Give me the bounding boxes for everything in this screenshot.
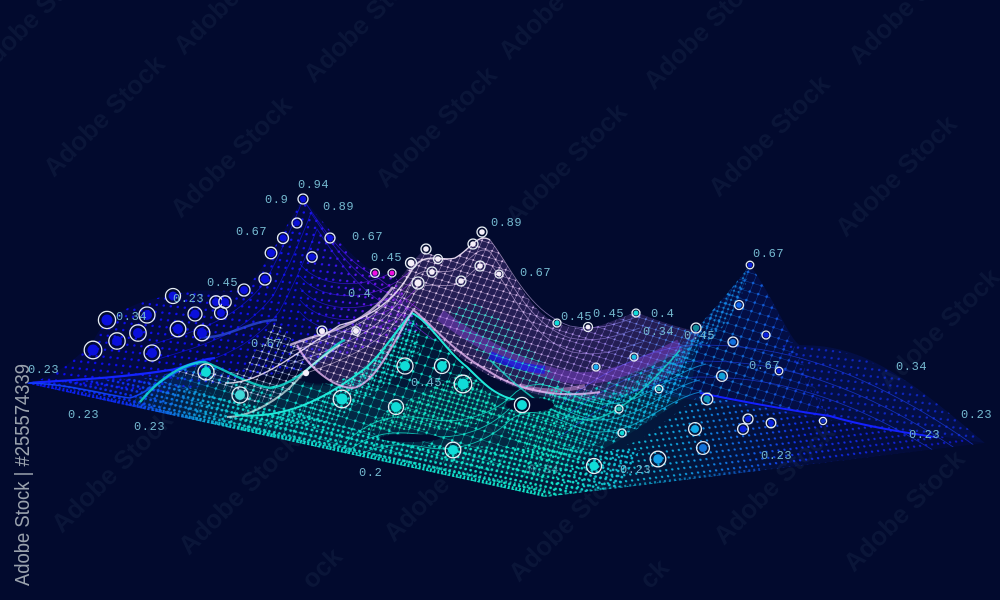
wave mesh surface	[25, 199, 985, 497]
data value labels: 0.67	[352, 230, 383, 244]
watermarks: Adobe Stock	[164, 89, 298, 223]
magenta data points	[371, 269, 396, 277]
pink central mesh	[290, 238, 700, 401]
teal centre bowl	[360, 374, 500, 432]
teal data points	[198, 309, 663, 474]
watermarks: Adobe Stock	[369, 59, 503, 193]
watermarks: Adobe Stock	[37, 48, 171, 182]
floor grid	[25, 372, 985, 497]
data value labels: 0.9	[265, 193, 288, 207]
back-left blue mountain	[25, 199, 434, 395]
dark valley gaps	[380, 398, 554, 442]
teal foreground mesh	[130, 303, 706, 480]
data value labels: 0.45	[371, 251, 402, 265]
data value labels: 0.23	[761, 449, 792, 463]
watermarks: Adobe Stock	[172, 426, 306, 560]
data value labels: 0.23	[134, 420, 165, 434]
teal left bowl	[225, 313, 420, 425]
watermarks: Adobe Stock	[377, 413, 511, 547]
blue data points	[84, 194, 335, 361]
data value labels: 0.4	[651, 307, 674, 321]
data value labels: 0.89	[323, 200, 354, 214]
bright ridge lines	[140, 238, 680, 420]
data value labels: 0.94	[298, 178, 329, 192]
data value labels: 0.45	[593, 307, 624, 321]
blue horizon streaks	[28, 320, 935, 437]
vertical stock credit: Adobe Stock | #255574339	[12, 364, 34, 586]
watermarks: Adobe Stock	[499, 96, 633, 230]
data value labels: 0.4	[348, 287, 371, 301]
watermarks: ock	[295, 541, 348, 594]
data value labels	[28, 178, 992, 480]
watermarks: Adobe Stock	[707, 416, 841, 550]
watermarks: Adobe Stock	[45, 404, 179, 538]
data value labels: 0.67	[753, 247, 784, 261]
teal upper ridge	[450, 303, 640, 406]
back-right blue mountain	[560, 267, 984, 450]
data value labels: 0.45	[207, 276, 238, 290]
watermarks: ck	[633, 552, 675, 594]
data value labels: 0.23	[909, 428, 940, 442]
data value labels: 0.34	[528, 463, 559, 477]
white left hill	[170, 323, 306, 402]
data points	[84, 194, 827, 474]
data value labels: 0.23	[961, 408, 992, 422]
data value labels: 0.45	[684, 329, 715, 343]
data value labels: 0.45	[561, 310, 592, 324]
data value labels: 0.2	[359, 466, 382, 480]
violet and blue band	[440, 315, 680, 390]
data value labels: 0.23	[173, 292, 204, 306]
data value labels: 0.67	[236, 225, 267, 239]
data value labels: 0.34	[643, 325, 674, 339]
watermarks: Adobe Stock	[502, 453, 636, 587]
data value labels: 0.45	[411, 376, 442, 390]
data value labels: 0.23	[28, 363, 59, 377]
data value labels: 0.67	[749, 359, 780, 373]
watermarks: Adobe Stock	[837, 443, 971, 577]
data value labels: 0.67	[520, 266, 551, 280]
data value labels: 0.23	[620, 463, 651, 477]
teal right bowl	[497, 338, 700, 458]
data value labels: 0.34	[896, 360, 927, 374]
data value labels: 0.67	[251, 337, 282, 351]
watermarks: Adobe Stock	[702, 68, 836, 202]
right-side data points	[592, 261, 827, 467]
watermarks: Adobe Stock	[829, 108, 963, 242]
data value labels: 0.23	[68, 408, 99, 422]
white data points	[303, 227, 592, 376]
data value labels: 0.89	[491, 216, 522, 230]
data value labels: 0.34	[116, 310, 147, 324]
